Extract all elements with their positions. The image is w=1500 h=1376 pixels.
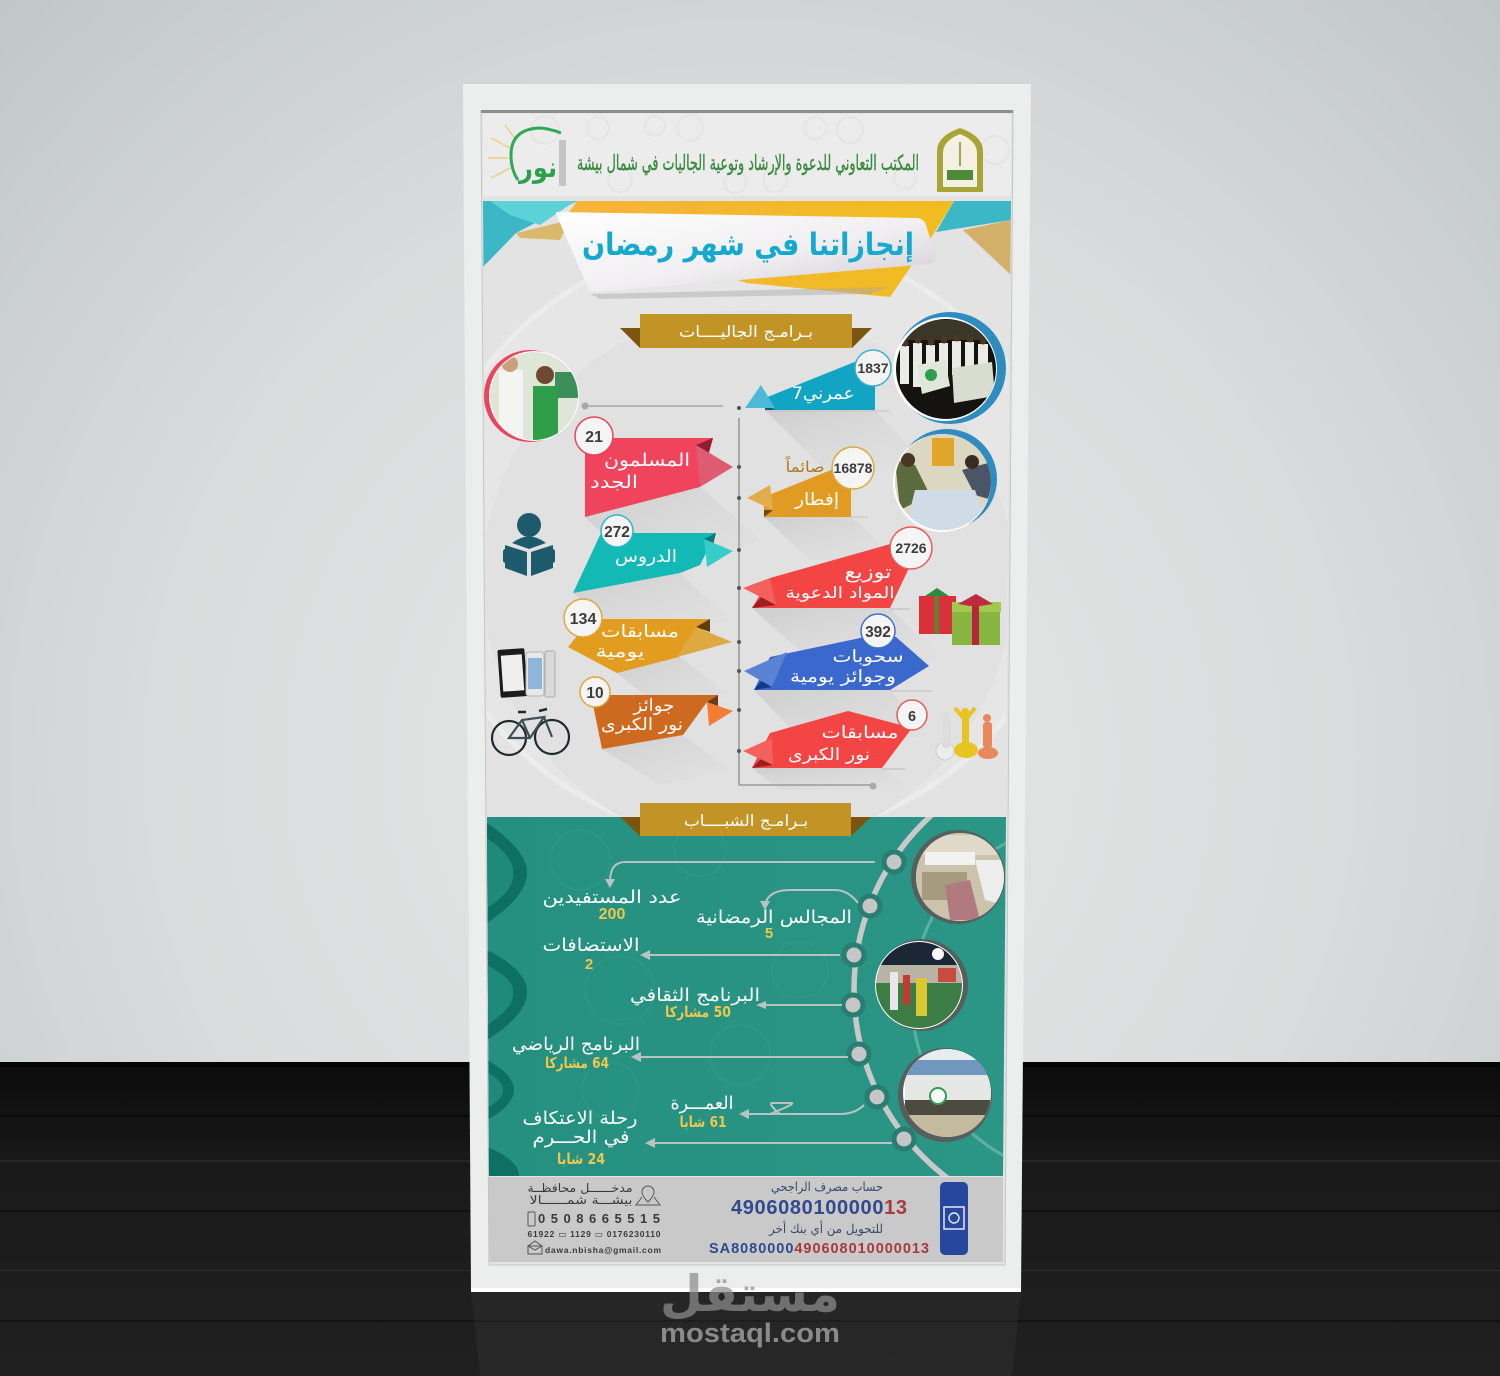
- title band decoration: [483, 201, 1011, 816]
- badge: 1837: 1837: [857, 360, 889, 376]
- youth text: itikaf trip: في الحـــرم: [532, 1127, 630, 1148]
- ribbon: iftar: صائماً: [785, 456, 824, 476]
- bank account details: SA8080000490608010000013: [709, 1241, 929, 1257]
- banner: youth programmes: [620, 803, 871, 836]
- connector dots: [843, 852, 914, 1149]
- bank account details: للتحويل من أي بنك أخر: [768, 1220, 883, 1237]
- photo: group with banners: [890, 312, 1006, 425]
- wall background: [0, 0, 1500, 1063]
- panel: youth programmes: [487, 817, 1006, 1176]
- ribbon: lessons: الدروس: [615, 547, 677, 567]
- badge: 392: [861, 614, 895, 648]
- watermark: Mostaql: [660, 1265, 840, 1348]
- icon: smartphones: [497, 648, 555, 698]
- youth text: umrah: [672, 1096, 732, 1130]
- icon: envelope: [528, 1241, 542, 1254]
- title card: [556, 212, 936, 299]
- youth text: itikaf trip: [522, 1108, 638, 1168]
- ribbon: distribution of materials: توزيع: [844, 562, 892, 583]
- photo: football match: [875, 939, 968, 1033]
- ribbon: Noor grand competition: [743, 711, 912, 769]
- badge: 10: [580, 677, 610, 707]
- connector arrows: [610, 862, 892, 1143]
- ribbon: Noor grand competition: مسابقات: [822, 723, 898, 743]
- floor: [0, 1062, 1500, 1376]
- contact details: [528, 1181, 661, 1255]
- badge: 272: 272: [604, 524, 630, 541]
- youth text: sports programme: 64 مشاركا: [545, 1054, 609, 1072]
- ribbon: Umrah: [745, 361, 890, 411]
- ribbon: grand prizes: نور الكبرى: [601, 715, 683, 735]
- ribbon: new Muslims: الجدد: [590, 472, 638, 493]
- youth text: itikaf trip: 24 شابا: [557, 1150, 605, 1168]
- icon: gift boxes: [919, 588, 1001, 645]
- icon: bicycle: [492, 709, 569, 755]
- bank account details: حساب مصرف الراجحي: [771, 1179, 883, 1195]
- youth text: Ramadan gatherings: 5: [765, 925, 773, 942]
- contact details: 61922 ▭ 1129 ▭ 0176230110: [528, 1229, 661, 1239]
- banner: expatriates programmes: بـرامـج الجاليــــات: [679, 323, 813, 341]
- icon: podium figures: [936, 708, 998, 760]
- timeline: [582, 402, 876, 790]
- ribbon: new Muslims: [585, 438, 733, 517]
- bank account details: 490608010000013: [731, 1197, 907, 1219]
- ribbon: daily competitions: يومية: [596, 642, 645, 662]
- ribbon: draws and prizes: سحوبات: [832, 647, 904, 667]
- youth text: hosting: [544, 938, 638, 969]
- logo: Noor: نور: [517, 151, 557, 184]
- banner: expatriates programmes: [620, 314, 872, 348]
- panel: footer contact: [489, 1177, 1003, 1262]
- header band: [483, 114, 1011, 196]
- youth text: beneficiaries: [544, 890, 680, 919]
- ribbon: iftar: إفطار: [794, 490, 839, 510]
- decorative ornaments: [487, 823, 527, 1176]
- badge: 21: [575, 417, 613, 455]
- youth text: umrah: 61 شابا: [680, 1113, 726, 1131]
- youth text: umrah: العمـــرة: [670, 1093, 734, 1114]
- ribbon: new Muslims: المسلمون: [604, 450, 690, 471]
- ribbon: Noor grand competition: نور الكبرى: [788, 745, 870, 765]
- office name calligraphy: المكتب التعاوني للدعوة والإرشاد وتوعية الجاليات في شمال بيشة: [577, 151, 919, 175]
- icon: location pin: [636, 1186, 660, 1205]
- long shadows: [573, 410, 945, 790]
- youth text: Ramadan gatherings: [697, 910, 850, 938]
- photo: new Muslim with certificate: [484, 350, 580, 442]
- ribbon: Umrah: عمرني7: [792, 384, 854, 404]
- youth text: cultural programme: [631, 988, 758, 1020]
- badge: 6: [897, 700, 927, 730]
- ribbon: draws and prizes: وجوائز يومية: [790, 667, 896, 687]
- youth text: sports programme: البرنامج الرياضي: [512, 1034, 640, 1055]
- badge: 134: 134: [570, 611, 596, 628]
- youth text: cultural programme: البرنامج الثقافي: [630, 985, 760, 1006]
- youth text: itikaf trip: رحلة الاعتكاف: [522, 1108, 638, 1129]
- badge: 21: 21: [585, 429, 603, 446]
- badge: 2726: [890, 527, 932, 569]
- ribbon: grand prizes: جوائز: [632, 696, 674, 716]
- photo: iftar meal: [890, 429, 1000, 535]
- photo: umrah group: [898, 1048, 995, 1142]
- ribbon: lessons: [573, 533, 733, 593]
- youth text: hosting: 2: [585, 956, 593, 973]
- contact details: مدخــــــل محافظــة: [528, 1181, 632, 1195]
- watermark: Mostaql: mostaql.com: [660, 1318, 840, 1348]
- icon: Al Rajhi bank: [940, 1182, 968, 1255]
- badge: 272: [601, 515, 633, 547]
- badge: 134: [564, 599, 602, 637]
- frame reflection on floor: [471, 1292, 1021, 1376]
- youth text: beneficiaries: 200: [599, 906, 625, 923]
- ribbon: distribution of materials: [743, 543, 910, 609]
- inner arc: [913, 842, 1006, 1158]
- outer dashed arc: [851, 817, 949, 1176]
- icon: phone: [528, 1212, 535, 1226]
- youth text: beneficiaries: عدد المستفيدين: [542, 887, 682, 908]
- badge: 1837: [855, 350, 891, 386]
- badge: 2726: 2726: [895, 540, 927, 556]
- bank account details: [709, 1179, 929, 1257]
- title: إنجازاتنا في شهر رمضان: [582, 227, 914, 263]
- contact details: 0508665515: [538, 1211, 660, 1226]
- badge: 10: 10: [586, 685, 604, 702]
- contact details: بيشـــة شمــــــالا: [530, 1193, 632, 1207]
- badge: 6: 6: [908, 709, 916, 725]
- ribbon: grand prizes: [591, 695, 733, 749]
- ribbon: daily competitions: [568, 619, 732, 673]
- badge: 16878: [832, 447, 874, 489]
- youth text: cultural programme: 50 مشاركا: [665, 1003, 731, 1021]
- ribbon: iftar: [747, 456, 868, 517]
- youth text: Ramadan gatherings: المجالس الرمضانية: [696, 907, 852, 928]
- youth text: hosting: الاستضافات: [542, 935, 640, 956]
- banner: youth programmes: بـرامـج الشبــــاب: [684, 812, 808, 830]
- ribbon: distribution of materials: المواد الدعوية: [786, 583, 894, 603]
- ministry emblem: [937, 128, 983, 192]
- poster frame: [463, 84, 1031, 1292]
- ribbon: daily competitions: مسابقات: [601, 622, 679, 642]
- badge: 16878: 16878: [834, 460, 873, 476]
- icon: person reading: [503, 513, 555, 576]
- logo: Noor: [488, 125, 566, 186]
- photo: gathering: [911, 830, 1007, 924]
- watermark: Mostaql: مستقل: [660, 1265, 840, 1323]
- ribbon: draws and prizes: [744, 637, 932, 691]
- contact details: dawa.nbisha@gmail.com: [545, 1245, 661, 1255]
- youth text: sports programme: [512, 1034, 640, 1072]
- badge: 392: 392: [865, 624, 891, 641]
